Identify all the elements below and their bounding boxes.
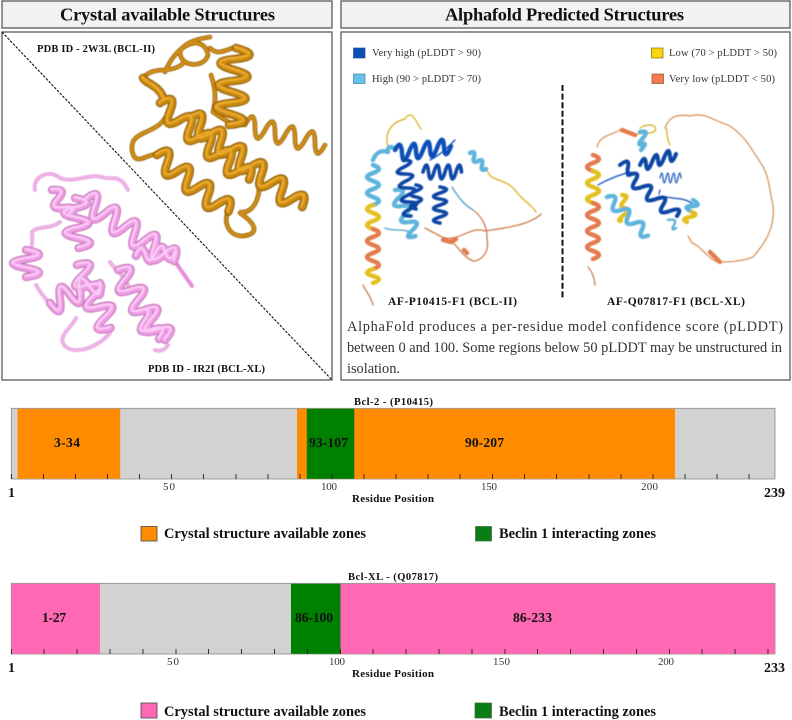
- label: PDB IR2I: PDB ID - IR2I (BCL-XL): [148, 364, 266, 375]
- segment: 86-233: 86-233: [513, 610, 552, 625]
- text block: pLDDT explanation: between 0 and 100. Some regions below 50 pLDDT may be unstructured in: [347, 340, 782, 356]
- axis labels: 1: [8, 486, 15, 501]
- legend: pLDDT confidence: Very high (pLDDT > 90): [372, 48, 482, 59]
- legend: pLDDT confidence: High (90 > pLDDT > 70): [372, 74, 482, 85]
- axis labels: [8, 656, 785, 680]
- legend: Bcl-2 zones: Crystal structure available zones: [164, 526, 366, 542]
- axis labels: 200: [641, 481, 658, 493]
- protein: AF-Q07817-F1 model: [587, 115, 773, 285]
- protein: BCL-XL crystal ribbon: [12, 174, 192, 351]
- segment: 3-34: 3-34: [54, 435, 80, 450]
- axis ticks: [12, 649, 768, 654]
- axis labels: 100: [321, 481, 338, 493]
- legend: pLDDT confidence: [354, 48, 778, 85]
- axis labels: 1: [8, 661, 15, 676]
- panel: crystal structures: [2, 32, 332, 380]
- axis labels: [8, 481, 785, 505]
- axis labels: 50: [163, 481, 176, 493]
- text block: pLDDT explanation: [347, 319, 783, 377]
- panel: crystal available structures header: [2, 1, 332, 28]
- segment: 93-107: 93-107: [309, 435, 348, 450]
- legend: Bcl-XL zones: Beclin 1 interacting zones: [499, 704, 656, 720]
- axis labels: Residue Position: [352, 493, 434, 505]
- axis labels: 100: [329, 656, 346, 668]
- bar background: [11, 408, 775, 479]
- chart title: Bcl-2 - (P10415): [354, 397, 434, 408]
- segment: 3-34: [18, 409, 120, 479]
- segment: 86-100: 86-100: [295, 610, 333, 625]
- text block: pLDDT explanation: isolation.: [347, 361, 400, 377]
- protein: BCL-II crystal ribbon: [132, 37, 325, 236]
- label: AF-Q07817-F1: AF-Q07817-F1 (BCL-XL): [607, 296, 745, 308]
- segment: 1-27: 1-27: [42, 610, 66, 625]
- legend: Bcl-XL zones: Crystal structure available zones: [164, 704, 366, 720]
- segment: 93-107: [307, 409, 354, 479]
- axis labels: 150: [481, 481, 498, 493]
- axis labels: 233: [764, 661, 785, 676]
- legend: Bcl-2 zones: Beclin 1 interacting zones: [499, 526, 656, 542]
- panel: alphafold header: [341, 1, 790, 28]
- panel: alphafold predicted structures: [341, 32, 790, 380]
- segment: 86-233: [340, 584, 775, 654]
- chart title: Bcl-XL - (Q07817): [348, 572, 438, 583]
- legend: pLDDT confidence: Very low (pLDDT < 50): [669, 74, 776, 85]
- axis labels: 50: [167, 656, 180, 668]
- segment: 86-100: [291, 584, 340, 654]
- axis labels: 239: [764, 486, 785, 501]
- label: AF-P10415-F1: AF-P10415-F1 (BCL-II): [388, 296, 517, 308]
- legend: pLDDT confidence: Low (70 > pLDDT > 50): [669, 48, 778, 59]
- divider: diagonal dashed line: [2, 32, 332, 380]
- label: PDB 2W3L: PDB ID - 2W3L (BCL-II): [37, 44, 156, 55]
- axis labels: Residue Position: [352, 668, 434, 680]
- bar background: [11, 583, 775, 654]
- legend: Bcl-XL zones: [141, 703, 656, 720]
- chart: Bcl-XL residue map: [8, 572, 785, 680]
- segment: 90-207: [297, 409, 675, 479]
- axis labels: 200: [658, 656, 674, 668]
- legend: Bcl-2 zones: [141, 526, 656, 542]
- text block: pLDDT explanation: AlphaFold produces a per-residue model confidence score (pLDDT): [347, 319, 783, 335]
- divider: vertical dashed line: [562, 85, 564, 299]
- axis labels: 150: [493, 656, 510, 668]
- heading: crystal available structures: Crystal available Structures: [60, 4, 275, 24]
- protein: AF-P10415-F1 model: [363, 115, 541, 305]
- heading: alphafold predicted structures: Alphafold Predicted Structures: [445, 4, 684, 24]
- segment: 90-207: 90-207: [465, 435, 504, 450]
- segment: 1-27: [12, 584, 100, 654]
- axis ticks: [12, 474, 749, 479]
- chart: Bcl-2 residue map: [8, 397, 785, 505]
